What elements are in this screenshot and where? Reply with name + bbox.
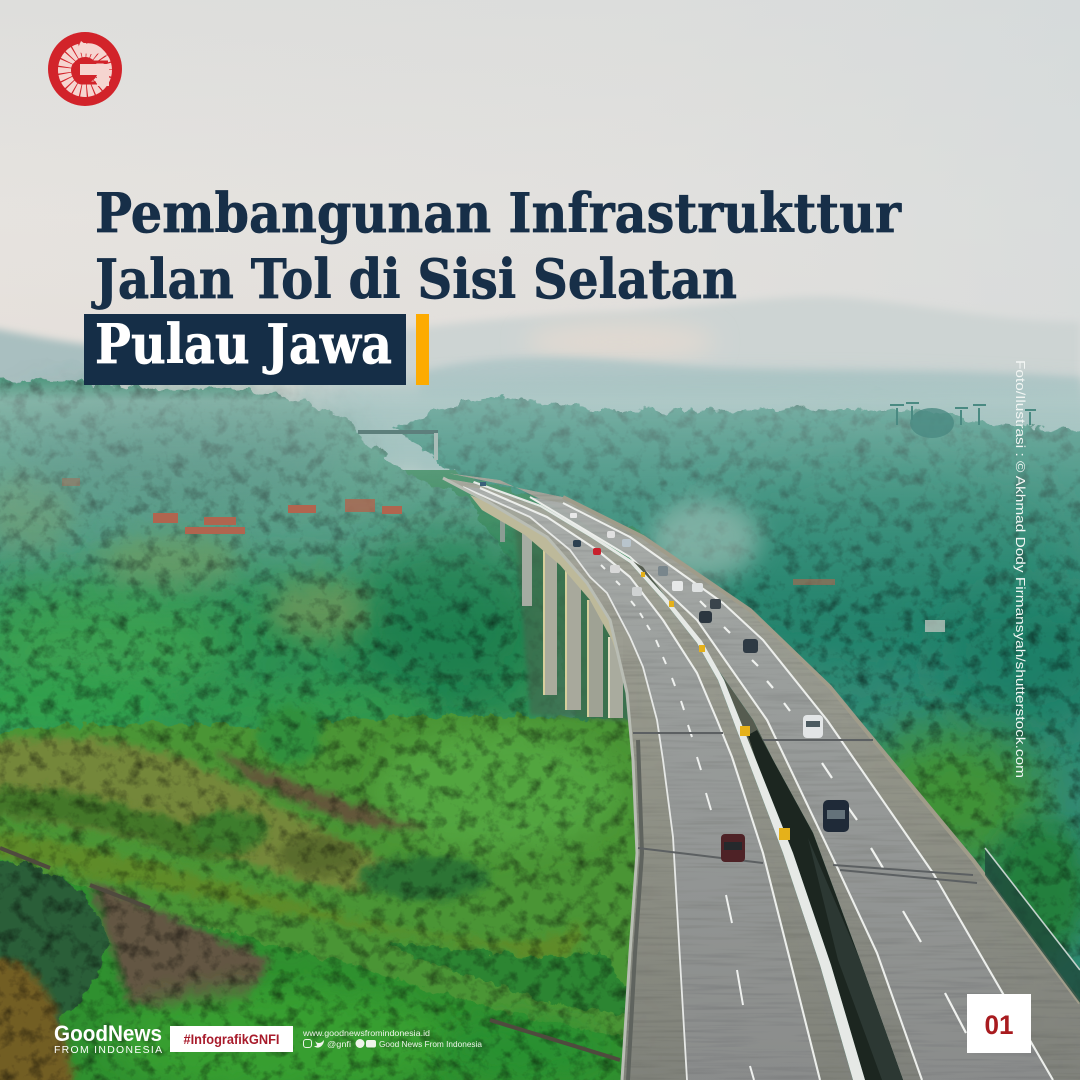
page number badge — [967, 994, 1031, 1053]
road warning signs — [641, 572, 790, 840]
expansion joint shadows — [633, 733, 977, 883]
footer website and social handles — [302, 1028, 482, 1049]
photo background: sky and distant mountains — [0, 0, 1080, 480]
hashtag label — [170, 1026, 293, 1052]
social icons — [304, 1039, 376, 1048]
foliage layer: valley forests and meadow — [0, 381, 1080, 1080]
footer brand: GoodNews From Indonesia — [54, 1021, 162, 1056]
palm trees on the ridge — [890, 403, 1036, 438]
foreground meadow — [0, 716, 660, 1080]
photo credit: Foto/Ilustrasi : © Akhmad Dody Firmansyah/shutterstock.com — [1013, 360, 1027, 778]
median: dark gap and fence — [633, 561, 903, 1080]
foliage base fill under texture — [0, 470, 1080, 1080]
footer brand: GoodNews From Indonesia: FROM INDONESIA — [54, 1045, 162, 1056]
vehicles — [480, 482, 849, 862]
toll road: right carriageway — [447, 473, 1080, 1080]
title: Jalan Tol di Sisi Selatan — [91, 247, 737, 311]
median barrier — [473, 481, 865, 1080]
hashtag label: #InfografikGNFI — [184, 1032, 280, 1047]
logo: GNFI red garuda badge — [48, 32, 122, 106]
page number badge: 01 — [984, 1010, 1014, 1040]
dirt paths through the meadow — [0, 848, 620, 1060]
bridge piers — [500, 510, 640, 722]
left forest — [0, 381, 580, 745]
footer website and social handles: Good News From Indonesia — [379, 1039, 482, 1049]
village rooftops — [62, 478, 945, 632]
right forest — [395, 398, 1080, 1080]
footer website and social handles: www.goodnewsfromindonesia.id — [302, 1028, 430, 1038]
orange accent bar — [416, 314, 429, 385]
bridge underside girder — [470, 495, 622, 670]
title — [91, 181, 901, 311]
title: Pembangunan Infrastrukttur — [95, 181, 901, 245]
outer parapets and fence — [443, 478, 1080, 1080]
lane lines — [463, 487, 687, 1080]
lane lines — [530, 497, 922, 1080]
highlighted title line: Pulau Jawa: Pulau Jawa — [95, 312, 392, 376]
mist over forest — [0, 375, 1080, 635]
toll road: left carriageway — [443, 478, 853, 1080]
footer website and social handles: @gnfi — [327, 1040, 351, 1049]
distant overpass — [358, 430, 438, 460]
footer brand: GoodNews From Indonesia: GoodNews — [54, 1021, 162, 1046]
